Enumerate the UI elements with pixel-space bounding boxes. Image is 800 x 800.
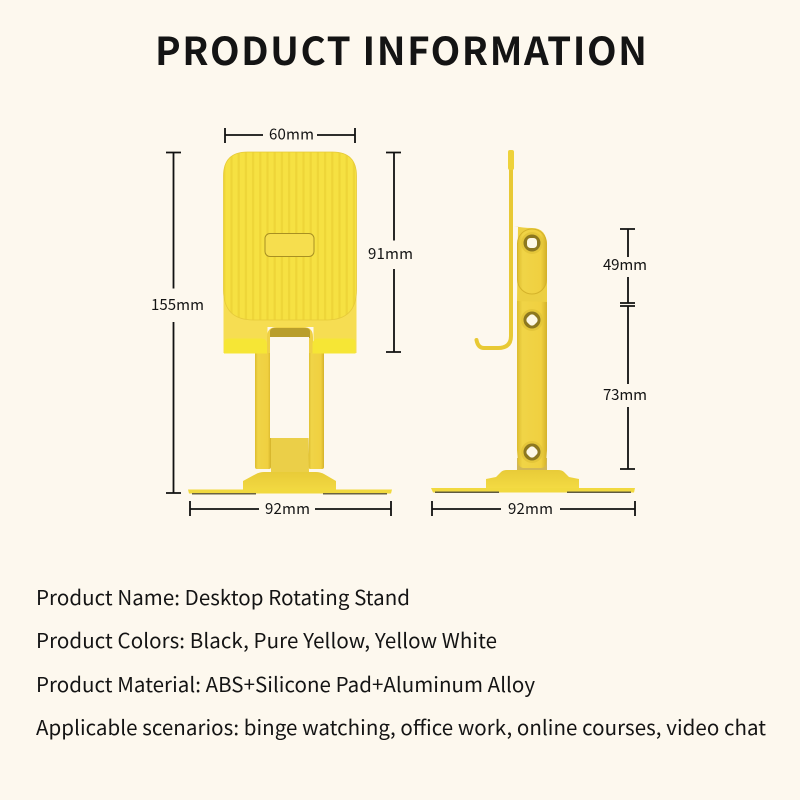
base plate bbox=[188, 488, 392, 494]
dimension: 73mm bbox=[603, 306, 647, 469]
base plate bbox=[431, 488, 635, 493]
dimension: 60mm width bbox=[225, 124, 355, 144]
button bbox=[265, 234, 314, 256]
short arm bbox=[514, 226, 547, 302]
dimension: 49mm: 49mm bbox=[603, 254, 647, 275]
product name: Product Name: Desktop Rotating Stand bbox=[36, 581, 410, 611]
dimension: 60mm width: 60mm bbox=[269, 124, 314, 144]
product colors: Product Colors: Black, Pure Yellow, Yellow White bbox=[36, 624, 497, 654]
hinge bbox=[271, 438, 309, 472]
dimension: 49mm bbox=[603, 229, 647, 306]
rotating base bbox=[486, 470, 579, 488]
dimension: 92mm side width bbox=[432, 498, 635, 519]
long arm bbox=[517, 458, 547, 470]
dimension: 155mm height bbox=[151, 152, 204, 493]
applicable scenarios: Applicable scenarios: binge watching, office work, online courses, video chat bbox=[36, 711, 766, 741]
dimension: 92mm front width bbox=[190, 498, 391, 519]
ribbed face bbox=[224, 152, 356, 320]
dimension: 92mm side width: 92mm bbox=[508, 498, 553, 519]
rotating base bbox=[243, 472, 336, 492]
phone ledges bbox=[224, 338, 267, 354]
dimension: 155mm height: 155mm bbox=[151, 294, 204, 315]
phone support panel bbox=[224, 152, 356, 353]
front view of stand bbox=[188, 152, 392, 494]
product details bbox=[36, 581, 766, 741]
cutout bbox=[267, 327, 313, 353]
dimension: 91mm height: 91mm bbox=[368, 243, 413, 264]
product material: Product Material: ABS+Silicone Pad+Aluminum Alloy bbox=[36, 668, 535, 698]
title: PRODUCT INFORMATION bbox=[155, 21, 647, 77]
pivot screws bbox=[521, 232, 543, 254]
dimension: 91mm height bbox=[368, 152, 413, 352]
dimension: 73mm: 73mm bbox=[603, 384, 647, 405]
side view of stand bbox=[431, 150, 635, 493]
legs bbox=[255, 350, 324, 469]
side plate and hook bbox=[476, 150, 514, 348]
dimension: 92mm front width: 92mm bbox=[265, 498, 310, 519]
